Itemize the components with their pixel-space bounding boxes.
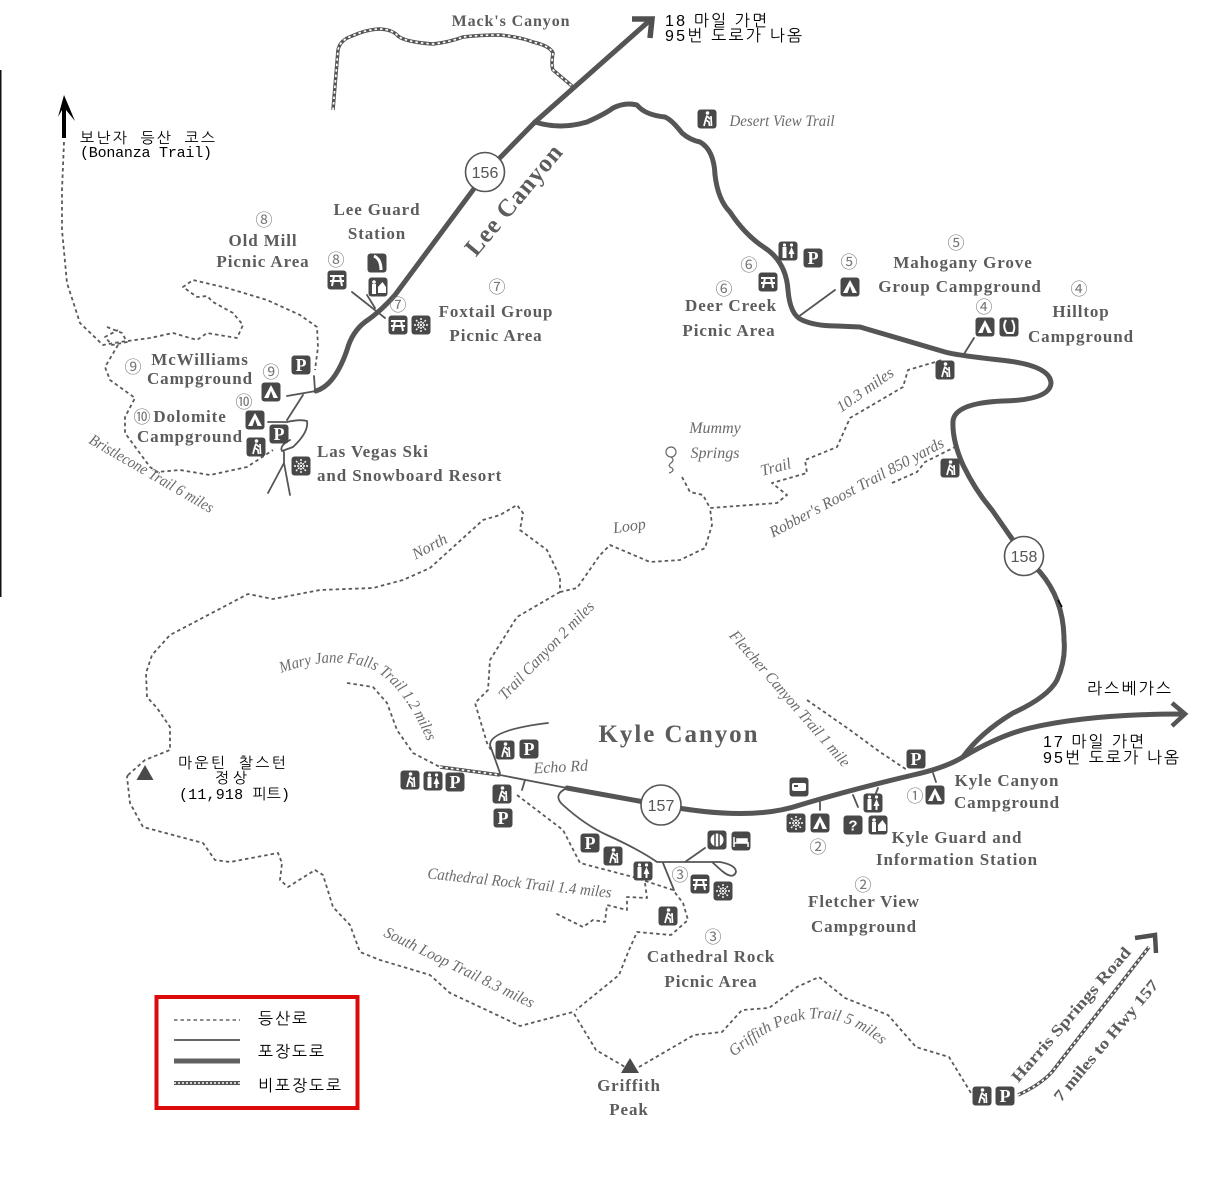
icon: parking road end <box>494 808 512 828</box>
icon: tent McWilliams <box>262 382 280 402</box>
trail labels: South Loop Trail 8.3 miles <box>381 924 537 1012</box>
icon: picnic Cathedral <box>690 874 710 894</box>
icon: parking Mary Jane <box>446 772 464 792</box>
circled numbers: ⑦ <box>488 273 506 298</box>
label: Dolomite: Dolomite <box>153 407 227 426</box>
heading: Lee Canyon: Lee Canyon <box>460 139 569 262</box>
label: Mack's Canyon: Mack's Canyon <box>452 13 570 30</box>
icon: parking Deer Creek: P <box>808 248 818 268</box>
icon: restroom Cathedral <box>634 862 652 880</box>
unpaved road: Harris Springs <box>1018 947 1149 1095</box>
circled numbers: ⑨ <box>124 353 142 378</box>
road: 158 <box>535 104 1064 757</box>
icon: parking Cathedral: P <box>584 833 596 853</box>
Korean note: Bonanza trail: (Bonanza Trail) <box>80 145 212 162</box>
icon: parking Deer Creek <box>804 248 822 268</box>
circled numbers: ② <box>854 871 872 896</box>
circled numbers: ⑨ <box>262 358 280 383</box>
icon: restroom Deer Creek <box>778 242 798 260</box>
circled numbers: ③ <box>704 923 722 948</box>
label: Foxtail: Picnic Area <box>449 326 543 345</box>
circled numbers <box>124 206 1088 948</box>
route badge 158 <box>1004 536 1044 576</box>
icon: lodging <box>732 832 750 850</box>
label: Hilltop: Hilltop <box>1052 302 1110 321</box>
trail: Mack's Canyon unpaved road <box>333 29 572 110</box>
trail labels: Loop <box>611 516 647 537</box>
label: 7 miles to Hwy 157: 7 miles to Hwy 157 <box>1051 977 1162 1105</box>
trail: North Loop <box>128 505 560 775</box>
circled numbers: ② <box>810 833 826 858</box>
icon: fire ring Hilltop <box>1000 318 1018 336</box>
icon: Griffith Peak summit <box>621 1058 639 1073</box>
Korean note: north via 156: 18 마일 가면 <box>665 12 767 30</box>
route badge 156 <box>466 152 504 192</box>
arrow: Bonanza Trail <box>58 95 75 138</box>
trail: North Loop eastern segment <box>560 360 942 592</box>
trail labels: Fletcher Canyon Trail 1 mile <box>725 627 853 771</box>
Korean note: Mt Charleston summit <box>178 755 290 804</box>
trail: Cathedral Rock <box>517 795 688 1010</box>
label: Old Mill: Picnic Area <box>216 252 310 271</box>
label: Kyle Canyon Campground: Kyle Canyon <box>955 771 1059 790</box>
icon: Mummy Springs <box>666 447 676 473</box>
circled numbers: ⑥ <box>716 275 732 300</box>
Korean note: Mt Charleston summit: 마운틴 찰스턴 <box>178 755 286 773</box>
label: Las Vegas Ski: and Snowboard Resort <box>317 466 502 485</box>
icon: information: ? <box>848 818 858 834</box>
road: 157 Kyle Canyon <box>567 714 1183 814</box>
icon: phone Lee Guard <box>368 254 386 272</box>
circled numbers: ⑤ <box>948 229 964 254</box>
trail: Mary Jane Falls <box>347 683 440 767</box>
icon: parking Griffith trailhead: P <box>1000 1086 1010 1106</box>
label: Hilltop: Campground <box>1028 327 1134 346</box>
icon: hiker Echo <box>496 740 514 760</box>
icon: picnic Deer Creek <box>758 272 778 292</box>
trail labels: Trail <box>759 455 794 480</box>
Korean note: north via 156: 95번 도로가 나옴 <box>665 27 802 45</box>
Korean note: Mt Charleston summit: (11,918 피트) <box>179 786 290 804</box>
circled numbers: ⑥ <box>740 251 758 276</box>
trail labels: Springs <box>691 445 739 462</box>
route badge 157 <box>641 785 681 825</box>
icon: tent Dolomite <box>246 410 264 430</box>
Korean note: south via 157: 17 마일 가면 <box>1043 733 1144 751</box>
trail: Mummy Springs <box>682 477 710 508</box>
label: Harris Springs Road: Harris Springs Road <box>1008 944 1135 1086</box>
circled numbers: ④ <box>1070 275 1088 300</box>
icon: guard station Lee <box>368 278 388 296</box>
trail labels <box>86 113 947 1055</box>
black margin line <box>0 70 2 597</box>
icon: hiker Robbers Roost <box>940 458 960 478</box>
trail: South Loop <box>127 775 625 1067</box>
icon: snow Fletcher <box>786 814 806 832</box>
icon: tent Mahogany <box>840 278 860 296</box>
icon: parking Fletcher <box>906 749 926 769</box>
trail: Griffith Peak <box>639 977 971 1093</box>
trail: Trail Canyon <box>475 592 560 750</box>
label: McWilliams: Campground <box>147 369 253 388</box>
trail: Bonanza and upper loop <box>62 142 318 370</box>
label: Lee Guard Station: Lee Guard <box>334 200 420 219</box>
trail labels: Bristlecone Trail 6 miles <box>86 431 217 517</box>
label: Kyle Guard: Kyle Guard and <box>892 828 1022 847</box>
icon: hiker upper north loop <box>936 360 954 380</box>
Korean note: north via 156 <box>665 12 802 45</box>
icon: Mountain Charleston summit <box>136 765 154 780</box>
arrow head: road 156 <box>632 19 652 38</box>
trail: small junction loop <box>105 327 127 345</box>
trail labels: Mummy <box>688 420 742 437</box>
label: Foxtail: Foxtail Group <box>439 302 553 321</box>
circled numbers: ⑩ <box>236 388 252 413</box>
circled numbers: ⑧ <box>328 246 344 271</box>
legend: 포장도로 <box>258 1043 324 1061</box>
label: Griffith Peak: Peak <box>609 1100 649 1119</box>
icon: picnic Old Mill <box>328 270 346 290</box>
legend <box>156 997 358 1108</box>
trail labels: Cathedral Rock Trail 1.4 miles <box>427 865 612 902</box>
circled numbers: ⑦ <box>390 291 406 316</box>
icon: tent Kyle Canyon <box>926 786 944 804</box>
icon: food <box>708 830 726 850</box>
label: Kyle Canyon Campground: Campground <box>954 793 1060 812</box>
icon: parking Griffith trailhead <box>996 1086 1014 1106</box>
trail: Fletcher Canyon <box>807 700 907 770</box>
icon: snow Foxtail <box>412 316 430 334</box>
circled numbers: ⑩ <box>134 403 150 428</box>
icon: hiker Griffith trailhead <box>972 1086 992 1106</box>
arrow head: road 157 <box>1172 703 1185 726</box>
Korean note: Mt Charleston summit: 정상 <box>215 770 248 788</box>
trail labels: North <box>409 531 450 564</box>
trail labels: Robber's Roost Trail 850 yards <box>766 435 947 542</box>
Korean note: Bonanza trail <box>80 130 215 162</box>
label: Las Vegas Ski: Las Vegas Ski <box>317 442 429 461</box>
icon: restroom Kyle <box>864 794 882 812</box>
label: Deer Creek: Deer Creek <box>685 296 777 315</box>
circled numbers: ① <box>906 782 924 807</box>
icon: parking Lee: P <box>296 355 306 375</box>
trail labels: Griffith Peak Trail 5 miles <box>730 1008 886 1055</box>
label: Fletcher View: Campground <box>811 917 917 936</box>
icon: guard Kyle <box>868 816 888 834</box>
label: Mahogany Grove: Mahogany Grove <box>893 253 1033 272</box>
circled numbers: ⑧ <box>256 206 272 231</box>
trail labels: Mary Jane Falls Trail 1.2 miles <box>279 652 434 740</box>
legend: 등산로 <box>258 1010 307 1028</box>
label: Old Mill: Old Mill <box>228 231 298 250</box>
trail labels: Trail Canyon 2 miles <box>495 598 598 704</box>
label: McWilliams: McWilliams <box>151 350 249 369</box>
icon: hiker Mary Jane <box>400 770 420 790</box>
icon: tent Fletcher <box>810 814 830 832</box>
icon: parking Lee <box>292 355 310 375</box>
icon: Desert View hiker <box>698 110 716 128</box>
Korean note: Las Vegas: 라스베가스 <box>1087 680 1171 698</box>
label: Deer Creek: Picnic Area <box>682 321 776 340</box>
icon: restroom Mary Jane <box>424 772 442 790</box>
label: Cathedral Rock: Picnic Area <box>664 972 758 991</box>
trail labels: 10.3 miles <box>834 364 897 416</box>
heading: Kyle Canyon: Kyle Canyon <box>598 721 758 748</box>
label: Dolomite: Campground <box>137 427 243 446</box>
icon: hiker South Loop <box>658 906 678 926</box>
icon: parking Cathedral <box>580 833 600 853</box>
trail: Cathedral Rock spur <box>555 883 647 927</box>
trail: Bristlecone <box>105 345 273 475</box>
icon: parking Echo: P <box>524 739 534 759</box>
arrow head: Harris Springs <box>1135 935 1156 953</box>
icon: tent Hilltop <box>976 318 994 336</box>
label: Kyle Guard: Information Station <box>876 850 1038 869</box>
trail labels: Desert View Trail <box>729 113 835 130</box>
paved side roads <box>268 290 974 890</box>
Korean note: south via 157: 95번 도로가 나옴 <box>1043 749 1179 767</box>
route badge 158: 158 <box>1011 549 1037 566</box>
unpaved road: Kyle west <box>440 767 500 775</box>
icon: RV <box>790 778 808 796</box>
icon: snow Cathedral <box>714 882 732 900</box>
icon: information <box>844 816 862 834</box>
icon: hiker Cathedral <box>604 846 622 866</box>
icon: parking Echo <box>520 739 538 759</box>
label: Griffith Peak: Griffith <box>597 1076 661 1095</box>
icon: parking Fletcher: P <box>910 749 922 769</box>
circled numbers: ④ <box>976 293 992 318</box>
icon: parking road end: P <box>498 808 508 828</box>
Korean note: Bonanza trail: 보난자 등산 코스 <box>80 130 215 148</box>
label: Mahogany Grove: Group Campground <box>878 277 1042 296</box>
icon: hiker Bristlecone <box>246 438 266 456</box>
circled numbers: ③ <box>672 861 688 886</box>
icon: snow Ski Resort <box>292 456 310 476</box>
trail labels: Echo Rd <box>532 758 589 777</box>
route badge 157: 157 <box>648 798 674 815</box>
road tick mark <box>1058 600 1062 607</box>
route badge 156: 156 <box>472 165 498 182</box>
circled numbers: ⑤ <box>840 248 858 273</box>
label: Lee Guard Station: Station <box>348 224 406 243</box>
icon: hiker road end <box>492 784 512 804</box>
label: Fletcher View: Fletcher View <box>808 892 920 911</box>
road: 156 Lee Canyon <box>316 22 648 391</box>
icon: parking Mary Jane: P <box>450 772 460 792</box>
icon: picnic Foxtail <box>388 316 408 334</box>
legend: 비포장도로 <box>258 1077 341 1095</box>
Korean note: south via 157 <box>1043 733 1179 767</box>
trail: Robber's Roost <box>892 447 955 483</box>
icon: parking Ski Resort: P <box>274 424 284 444</box>
label: Cathedral Rock: Cathedral Rock <box>647 947 775 966</box>
icon: parking Ski Resort <box>270 424 288 444</box>
